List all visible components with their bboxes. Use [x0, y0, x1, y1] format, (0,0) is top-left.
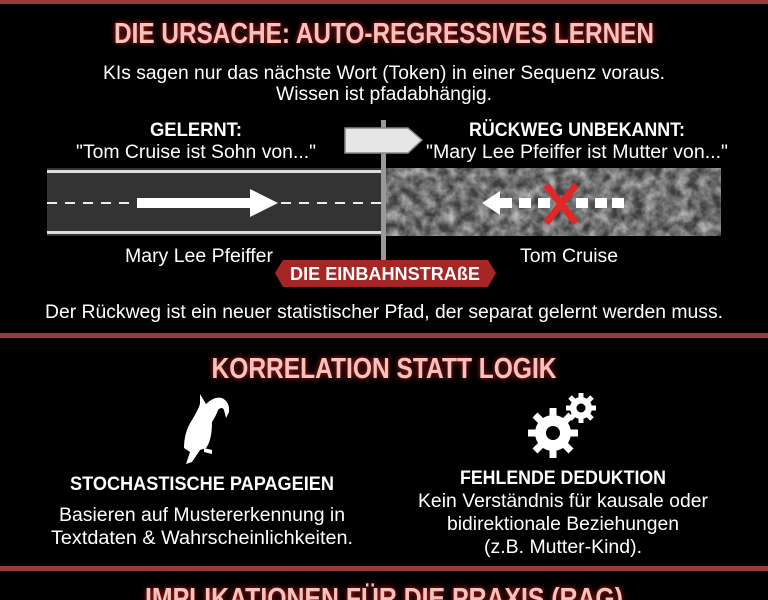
subtitle text [103, 63, 665, 105]
label: way back unknown: RÜCKWEG UNBEKANNT: [469, 120, 685, 141]
icon: parrot [184, 394, 229, 464]
road: broken way back [386, 168, 721, 236]
arrow: backward dashed [482, 191, 624, 215]
arrow: forward [137, 189, 278, 217]
label: way back unknown [426, 120, 728, 163]
signpost [345, 120, 422, 270]
banner: one-way street: DIE EINBAHNSTRAßE [290, 264, 480, 284]
block: missing deduction: FEHLENDE DEDUKTION [460, 468, 666, 489]
block: missing deduction: bidirektionale Beziehungen [447, 514, 679, 535]
label: way back unknown: "Mary Lee Pfeiffer ist Mutter von..." [426, 142, 728, 163]
block: stochastic parrots: STOCHASTISCHE PAPAGEIEN [70, 474, 334, 495]
block: missing deduction [418, 468, 709, 558]
road: learned direction [47, 168, 382, 236]
names [125, 246, 618, 267]
block: missing deduction: (z.B. Mutter-Kind). [484, 537, 642, 558]
icon: red x [546, 185, 576, 223]
label: learned: GELERNT: [150, 120, 242, 141]
subtitle text: Wissen ist pfadabhängig. [276, 84, 492, 105]
names: Tom Cruise [520, 246, 618, 267]
block: stochastic parrots: Textdaten & Wahrscheinlichkeiten. [51, 528, 353, 549]
block: stochastic parrots [51, 474, 353, 549]
banner: one-way street [275, 260, 496, 287]
block: missing deduction: Kein Verständnis für kausale oder [418, 491, 709, 512]
names: Mary Lee Pfeiffer [125, 246, 274, 267]
title: cause: DIE URSACHE: AUTO-REGRESSIVES LERNEN [114, 18, 654, 50]
text: explanation: Der Rückweg ist ein neuer statistischer Pfad, der separat gelernt werden muss. [45, 302, 723, 323]
title: correlation: KORRELATION STATT LOGIK [212, 353, 557, 385]
label: learned: "Tom Cruise ist Sohn von..." [76, 142, 316, 163]
label: learned [76, 120, 316, 163]
subtitle text: KIs sagen nur das nächste Wort (Token) in einer Sequenz voraus. [103, 63, 665, 84]
icon: gears [528, 393, 596, 458]
block: stochastic parrots: Basieren auf Mustererkennung in [59, 505, 345, 526]
